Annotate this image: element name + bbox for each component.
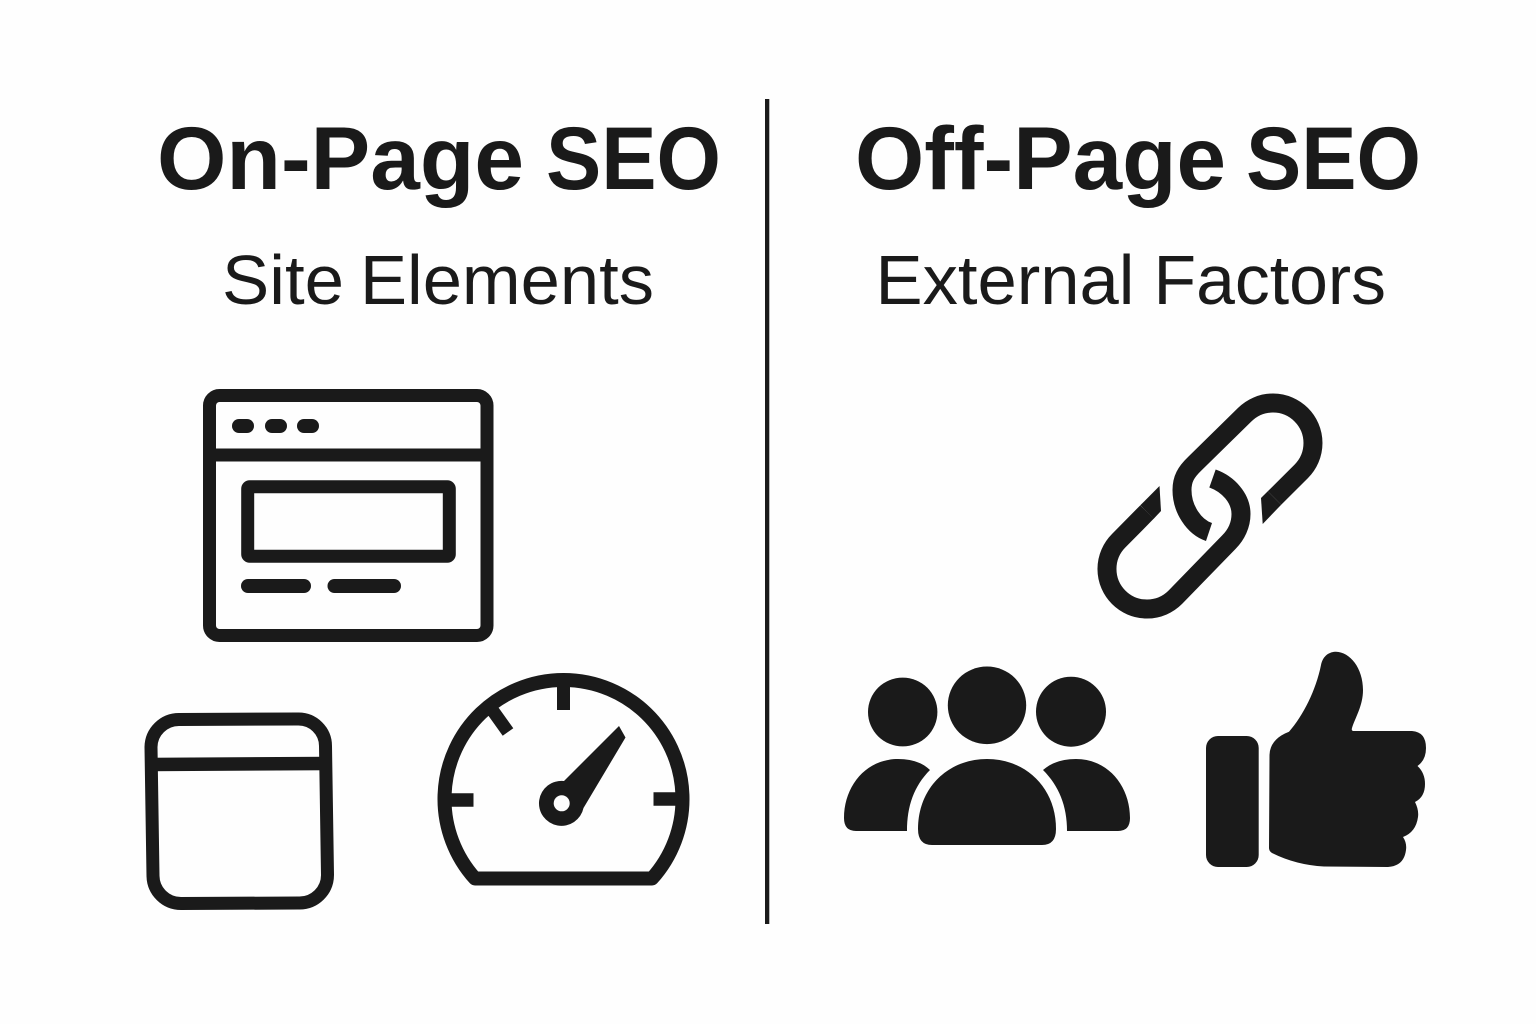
subheading: Site Elements: Site <box>222 241 344 319</box>
center divider <box>765 99 769 924</box>
icon: group of people <box>844 666 1130 845</box>
subheading: Site Elements: Elements <box>360 241 654 319</box>
panel: off-page SEO <box>844 108 1426 867</box>
icon: browser window <box>210 396 487 636</box>
icon: blank window <box>151 719 328 904</box>
heading: On-Page SEO: On-Page <box>157 108 524 208</box>
panel: on-page SEO <box>151 108 721 904</box>
icon: thumbs up <box>1206 652 1426 867</box>
icon: chain link <box>1107 403 1313 609</box>
icon: speedometer gauge <box>445 680 683 878</box>
heading: On-Page SEO: SEO <box>546 108 721 208</box>
heading: Off-Page SEO: Off-Page <box>855 108 1226 208</box>
heading: Off-Page SEO: SEO <box>1246 108 1421 208</box>
subheading: External Factors: Factors <box>1154 241 1386 319</box>
subheading: External Factors: External <box>876 241 1134 319</box>
